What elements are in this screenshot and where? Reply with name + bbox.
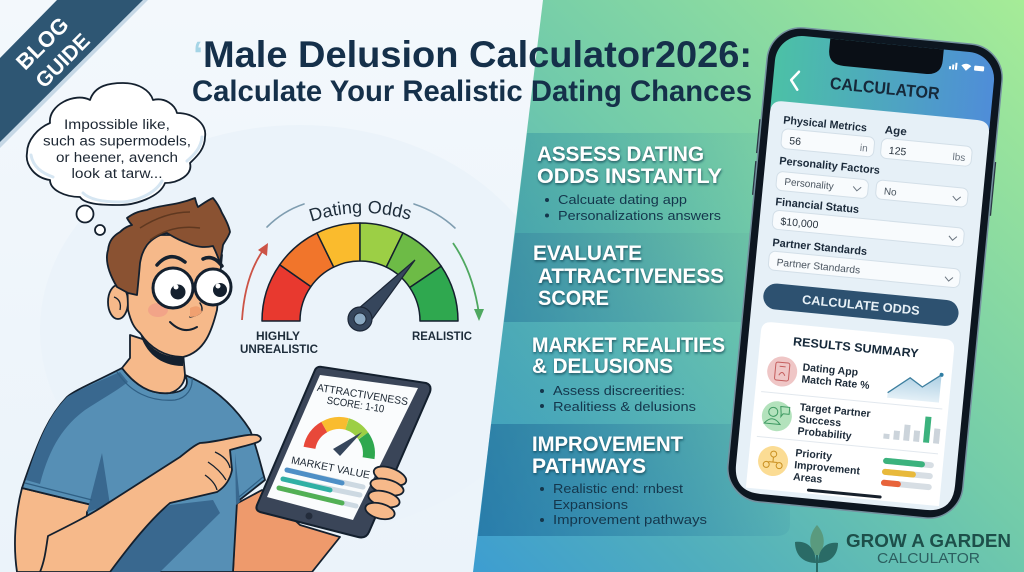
bullets: assess dating odds: Personalizations answers — [558, 208, 722, 223]
hair — [107, 198, 230, 295]
form: personality factors: No — [883, 186, 898, 199]
bullets: assess dating odds: Calcuate dating app — [558, 192, 687, 207]
calculate odds button — [762, 282, 960, 327]
ribbon: blog guide: BLOG — [11, 12, 74, 75]
form: personality factors: Personality — [784, 177, 834, 193]
gauge outer arc with title — [266, 200, 456, 229]
notch — [828, 39, 944, 75]
form: financial status: Financial Status — [775, 196, 860, 216]
thought bubble: look at tarw... — [72, 166, 162, 181]
title — [192, 34, 752, 108]
gauge needle — [348, 260, 415, 331]
tablet heading: SCORE: 1-10 — [326, 395, 385, 416]
gauge colour segments — [262, 223, 458, 321]
result row: target partner success probability — [760, 398, 942, 451]
hand fingers on tablet — [364, 463, 409, 522]
heading: assess dating odds: ODDS INSTANTLY — [537, 165, 722, 188]
result row: priority improvement areas — [756, 444, 934, 496]
logo wordmark: GROW A GARDEN — [846, 531, 1011, 551]
thought bubble: such as supermodels, — [43, 134, 191, 148]
pointing arm and hand — [40, 435, 261, 572]
result row: target partner success probability: Success — [798, 413, 842, 429]
tablet heading — [290, 382, 409, 482]
ribbon: blog guide — [0, 0, 148, 148]
phone side buttons — [752, 119, 998, 218]
panel: assess dating odds — [515, 133, 790, 233]
heading: improvement pathways: IMPROVEMENT — [532, 433, 683, 456]
thought bubble: or heener, avench — [56, 150, 178, 165]
result row: target partner success probability: Target Partner — [799, 401, 871, 420]
mouth — [170, 322, 197, 330]
result row: dating app match rate: Match Rate % — [801, 373, 871, 392]
left upper arm — [15, 488, 115, 572]
heading: market realities and delusions — [532, 334, 725, 378]
result row: target partner success probability: Probability — [797, 425, 852, 442]
form: age: 125 — [888, 145, 907, 158]
head — [107, 198, 231, 357]
phone screen header — [768, 34, 997, 154]
nose — [190, 303, 202, 317]
form: age: lbs — [952, 152, 966, 164]
phone form card — [733, 100, 990, 512]
t-shirt — [22, 368, 265, 572]
gauge labels: HIGHLY — [256, 329, 300, 343]
tablet progress bars — [279, 470, 363, 506]
results heading: RESULTS SUMMARY — [792, 334, 919, 360]
logo: grow a garden calculator: CALCULATOR — [877, 550, 980, 567]
gauge labels: REALISTIC — [412, 329, 472, 343]
tablet heading: MARKET VALUE — [290, 455, 371, 482]
tablet mini needle — [333, 432, 362, 456]
form: partner standards: Partner Standards — [776, 258, 861, 277]
tablet mini gauge — [309, 418, 374, 458]
right forearm — [233, 490, 340, 572]
bullets: improvement pathways: Improvement pathways — [553, 512, 708, 527]
heading: improvement pathways: PATHWAYS — [532, 455, 646, 478]
heading: evaluate attractiveness score — [533, 242, 724, 310]
calculator heading: CALCULATOR — [829, 74, 940, 103]
result row: priority improvement areas: Areas — [793, 471, 823, 486]
form: physical metrics — [781, 114, 876, 157]
background: pale circle — [40, 125, 560, 535]
bullets: market realities: Realitiess & delusions — [553, 399, 697, 414]
form: physical metrics: in — [859, 143, 868, 155]
eyebrows — [157, 257, 222, 266]
ear — [108, 285, 128, 319]
form: physical metrics: 56 — [789, 135, 802, 148]
home indicator — [807, 488, 882, 499]
man character — [15, 198, 430, 572]
form: age: Age — [884, 124, 907, 138]
heading: market realities and delusions: MARKET REALITIES — [532, 334, 725, 357]
bullets: improvement pathways — [540, 481, 708, 527]
tablet — [256, 367, 430, 537]
logo: grow a garden calculator — [795, 525, 1011, 572]
form: personality factors — [776, 155, 970, 208]
panel: evaluate attractiveness — [504, 233, 790, 322]
result row: priority improvement areas: Improvement — [794, 459, 861, 477]
form: partner standards — [768, 237, 962, 288]
gauge outer arc with title: Dating Odds — [309, 200, 411, 222]
thought bubble: Impossible like, — [64, 117, 170, 132]
tablet heading: ATTRACTIVENESS — [316, 382, 409, 408]
bullets: market realities — [540, 383, 697, 414]
heading: evaluate attractiveness score: EVALUATE — [533, 242, 642, 265]
form: physical metrics: Physical Metrics — [783, 114, 867, 134]
gauge: dating odds — [240, 200, 484, 356]
neck — [122, 335, 185, 393]
result row: priority improvement areas: Priority — [795, 447, 833, 463]
form: financial status: $10,000 — [780, 216, 819, 231]
bullets: assess dating odds — [545, 192, 722, 223]
eyes — [153, 268, 231, 308]
gauge labels: UNREALISTIC — [240, 342, 318, 356]
results summary card — [746, 321, 955, 506]
arrow: up to unrealistic — [242, 243, 268, 320]
phone body — [725, 25, 1005, 521]
bullets: market realities: Assess discreerities: — [553, 383, 685, 398]
heading: market realities and delusions: & DELUSIONS — [532, 355, 673, 378]
back chevron — [790, 71, 799, 90]
form: financial status — [772, 196, 966, 247]
form: personality factors: Personality Factors — [779, 155, 880, 177]
panel: market realities — [491, 322, 790, 424]
form: age — [880, 124, 974, 167]
heading: assess dating odds — [537, 143, 722, 188]
title: Male Delusion Calculator2026: — [203, 34, 752, 75]
heading: assess dating odds: ASSESS DATING — [537, 143, 704, 166]
heading: evaluate attractiveness score: ATTRACTIVENESS — [538, 265, 724, 288]
bullets: improvement pathways: Realistic end: rnbest — [553, 481, 683, 496]
neck shadow — [140, 333, 183, 366]
logo leaf icon — [795, 525, 838, 572]
form: partner standards: Partner Standards — [772, 237, 868, 258]
result row: dating app match rate: Dating App — [802, 361, 859, 379]
cheek — [148, 303, 168, 317]
ribbon: blog guide: GUIDE — [31, 29, 95, 93]
background: right gradient panel — [473, 0, 1024, 572]
calculate odds button: CALCULATE ODDS — [801, 293, 920, 318]
heading: improvement pathways — [532, 433, 683, 478]
title: Calculate Your Realistic Dating Chances — [192, 75, 752, 108]
panel: improvement pathways — [478, 424, 790, 536]
result row: dating app match rate — [766, 355, 944, 403]
title: ‘ — [193, 34, 203, 75]
heading: evaluate attractiveness score: SCORE — [538, 287, 609, 310]
arrow: down to realistic — [453, 243, 484, 321]
thought bubble — [27, 83, 205, 235]
status icons — [949, 62, 984, 72]
gauge labels — [240, 329, 472, 356]
phone — [723, 25, 1007, 521]
bullets: improvement pathways: Expansions — [553, 497, 629, 512]
face — [127, 235, 222, 357]
